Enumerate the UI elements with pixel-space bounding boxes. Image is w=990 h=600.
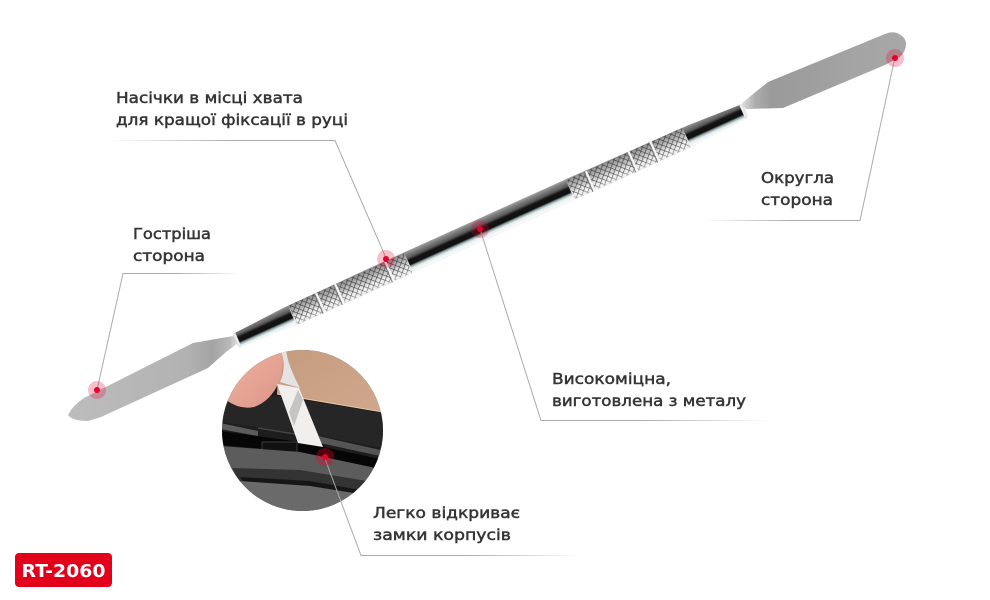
grip ring separators <box>316 261 394 313</box>
marker: shaft <box>471 220 489 238</box>
latch gap <box>222 431 378 468</box>
left grip <box>288 253 413 326</box>
marker: latch <box>316 448 334 466</box>
leader line: latches <box>324 456 580 556</box>
label: grip notches <box>116 89 348 129</box>
label: opens latches <box>373 504 520 544</box>
finger <box>228 352 283 408</box>
wood surface <box>277 350 380 412</box>
blade: sharp end <box>68 336 238 421</box>
label: round side <box>761 169 834 209</box>
label: opens latches: Легко відкриває <box>373 504 520 522</box>
label: sharp side: Гостріша <box>133 225 211 243</box>
label: opens latches: замки корпусів <box>373 526 511 544</box>
shaft <box>231 100 749 351</box>
badge: model number: RT-2060 <box>22 561 106 582</box>
label: round side: Округла <box>761 169 834 187</box>
seam strips <box>220 423 258 436</box>
shaft and knurled grips <box>231 100 750 351</box>
lower case <box>224 446 374 511</box>
blade in photo <box>280 350 300 388</box>
inset photo: opening a case latch <box>222 350 383 511</box>
label: sharp side: сторона <box>133 247 205 265</box>
marker: grip <box>377 250 395 268</box>
blade: round end <box>742 32 906 109</box>
label: high strength: Високоміцна, <box>552 370 671 388</box>
badge: model number <box>15 553 112 587</box>
marker: round side <box>886 49 904 67</box>
label: grip notches: Насічки в місці хвата <box>116 89 303 107</box>
right grip <box>566 127 691 200</box>
tool: double-ended steel spatula <box>68 32 906 421</box>
label: grip notches: для кращої фіксації в руці <box>116 111 348 129</box>
grip ring separators <box>586 142 659 191</box>
leader line: round side <box>705 57 895 220</box>
label: round side: сторона <box>761 191 833 209</box>
marker: sharp side <box>88 381 106 399</box>
leader line: strength <box>480 229 770 420</box>
leader line: grip <box>110 140 386 258</box>
label: sharp side <box>133 225 211 265</box>
laptop case top <box>220 396 383 448</box>
label: high strength: виготовлена з металу <box>552 392 746 410</box>
label: high strength <box>552 370 746 410</box>
leader line: sharp side <box>97 274 240 390</box>
